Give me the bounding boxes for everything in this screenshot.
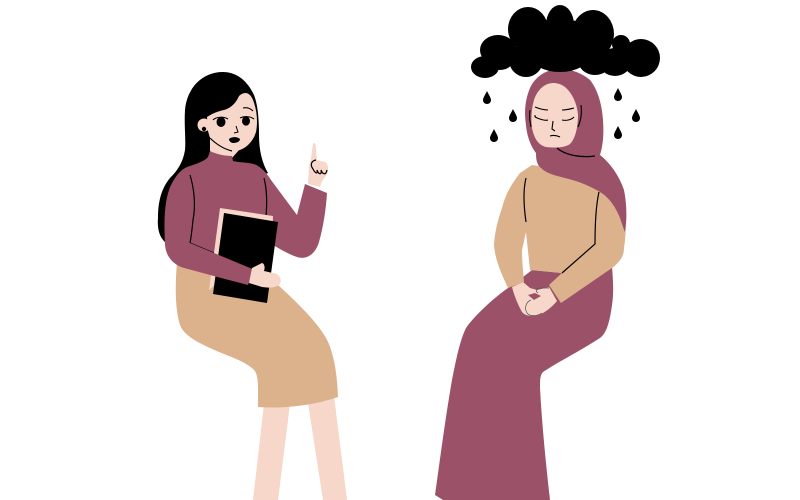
ear (198, 118, 210, 132)
hijab (525, 69, 626, 232)
dress (435, 266, 613, 500)
skirt (176, 260, 338, 408)
hand on book (249, 263, 281, 288)
dress gap between fingers (528, 293, 541, 300)
finger outline (526, 288, 549, 316)
earring (202, 127, 206, 131)
neck (210, 136, 240, 158)
sweater fold lines (190, 175, 267, 253)
pointing hand (308, 143, 328, 187)
figure: right woman under cloud (435, 69, 626, 500)
face (531, 83, 578, 148)
raindrops (483, 88, 640, 142)
hair (158, 72, 268, 243)
book back page (209, 208, 273, 290)
closed eyes, brows, nose, mouth (530, 105, 595, 157)
tan top (494, 165, 626, 303)
top fold lines (524, 178, 599, 273)
hands (512, 282, 557, 316)
book (209, 208, 278, 303)
face (207, 93, 257, 151)
nose (234, 126, 238, 133)
rain cloud (471, 5, 660, 78)
eyes and brows (213, 107, 254, 127)
finger lines (311, 160, 327, 174)
sleeve over book (178, 240, 254, 285)
book cover (213, 213, 278, 303)
mouth (229, 137, 240, 143)
sweater (164, 151, 327, 285)
figure: left woman with book (158, 72, 347, 500)
legs (253, 396, 347, 500)
neck shadow line (210, 138, 232, 151)
